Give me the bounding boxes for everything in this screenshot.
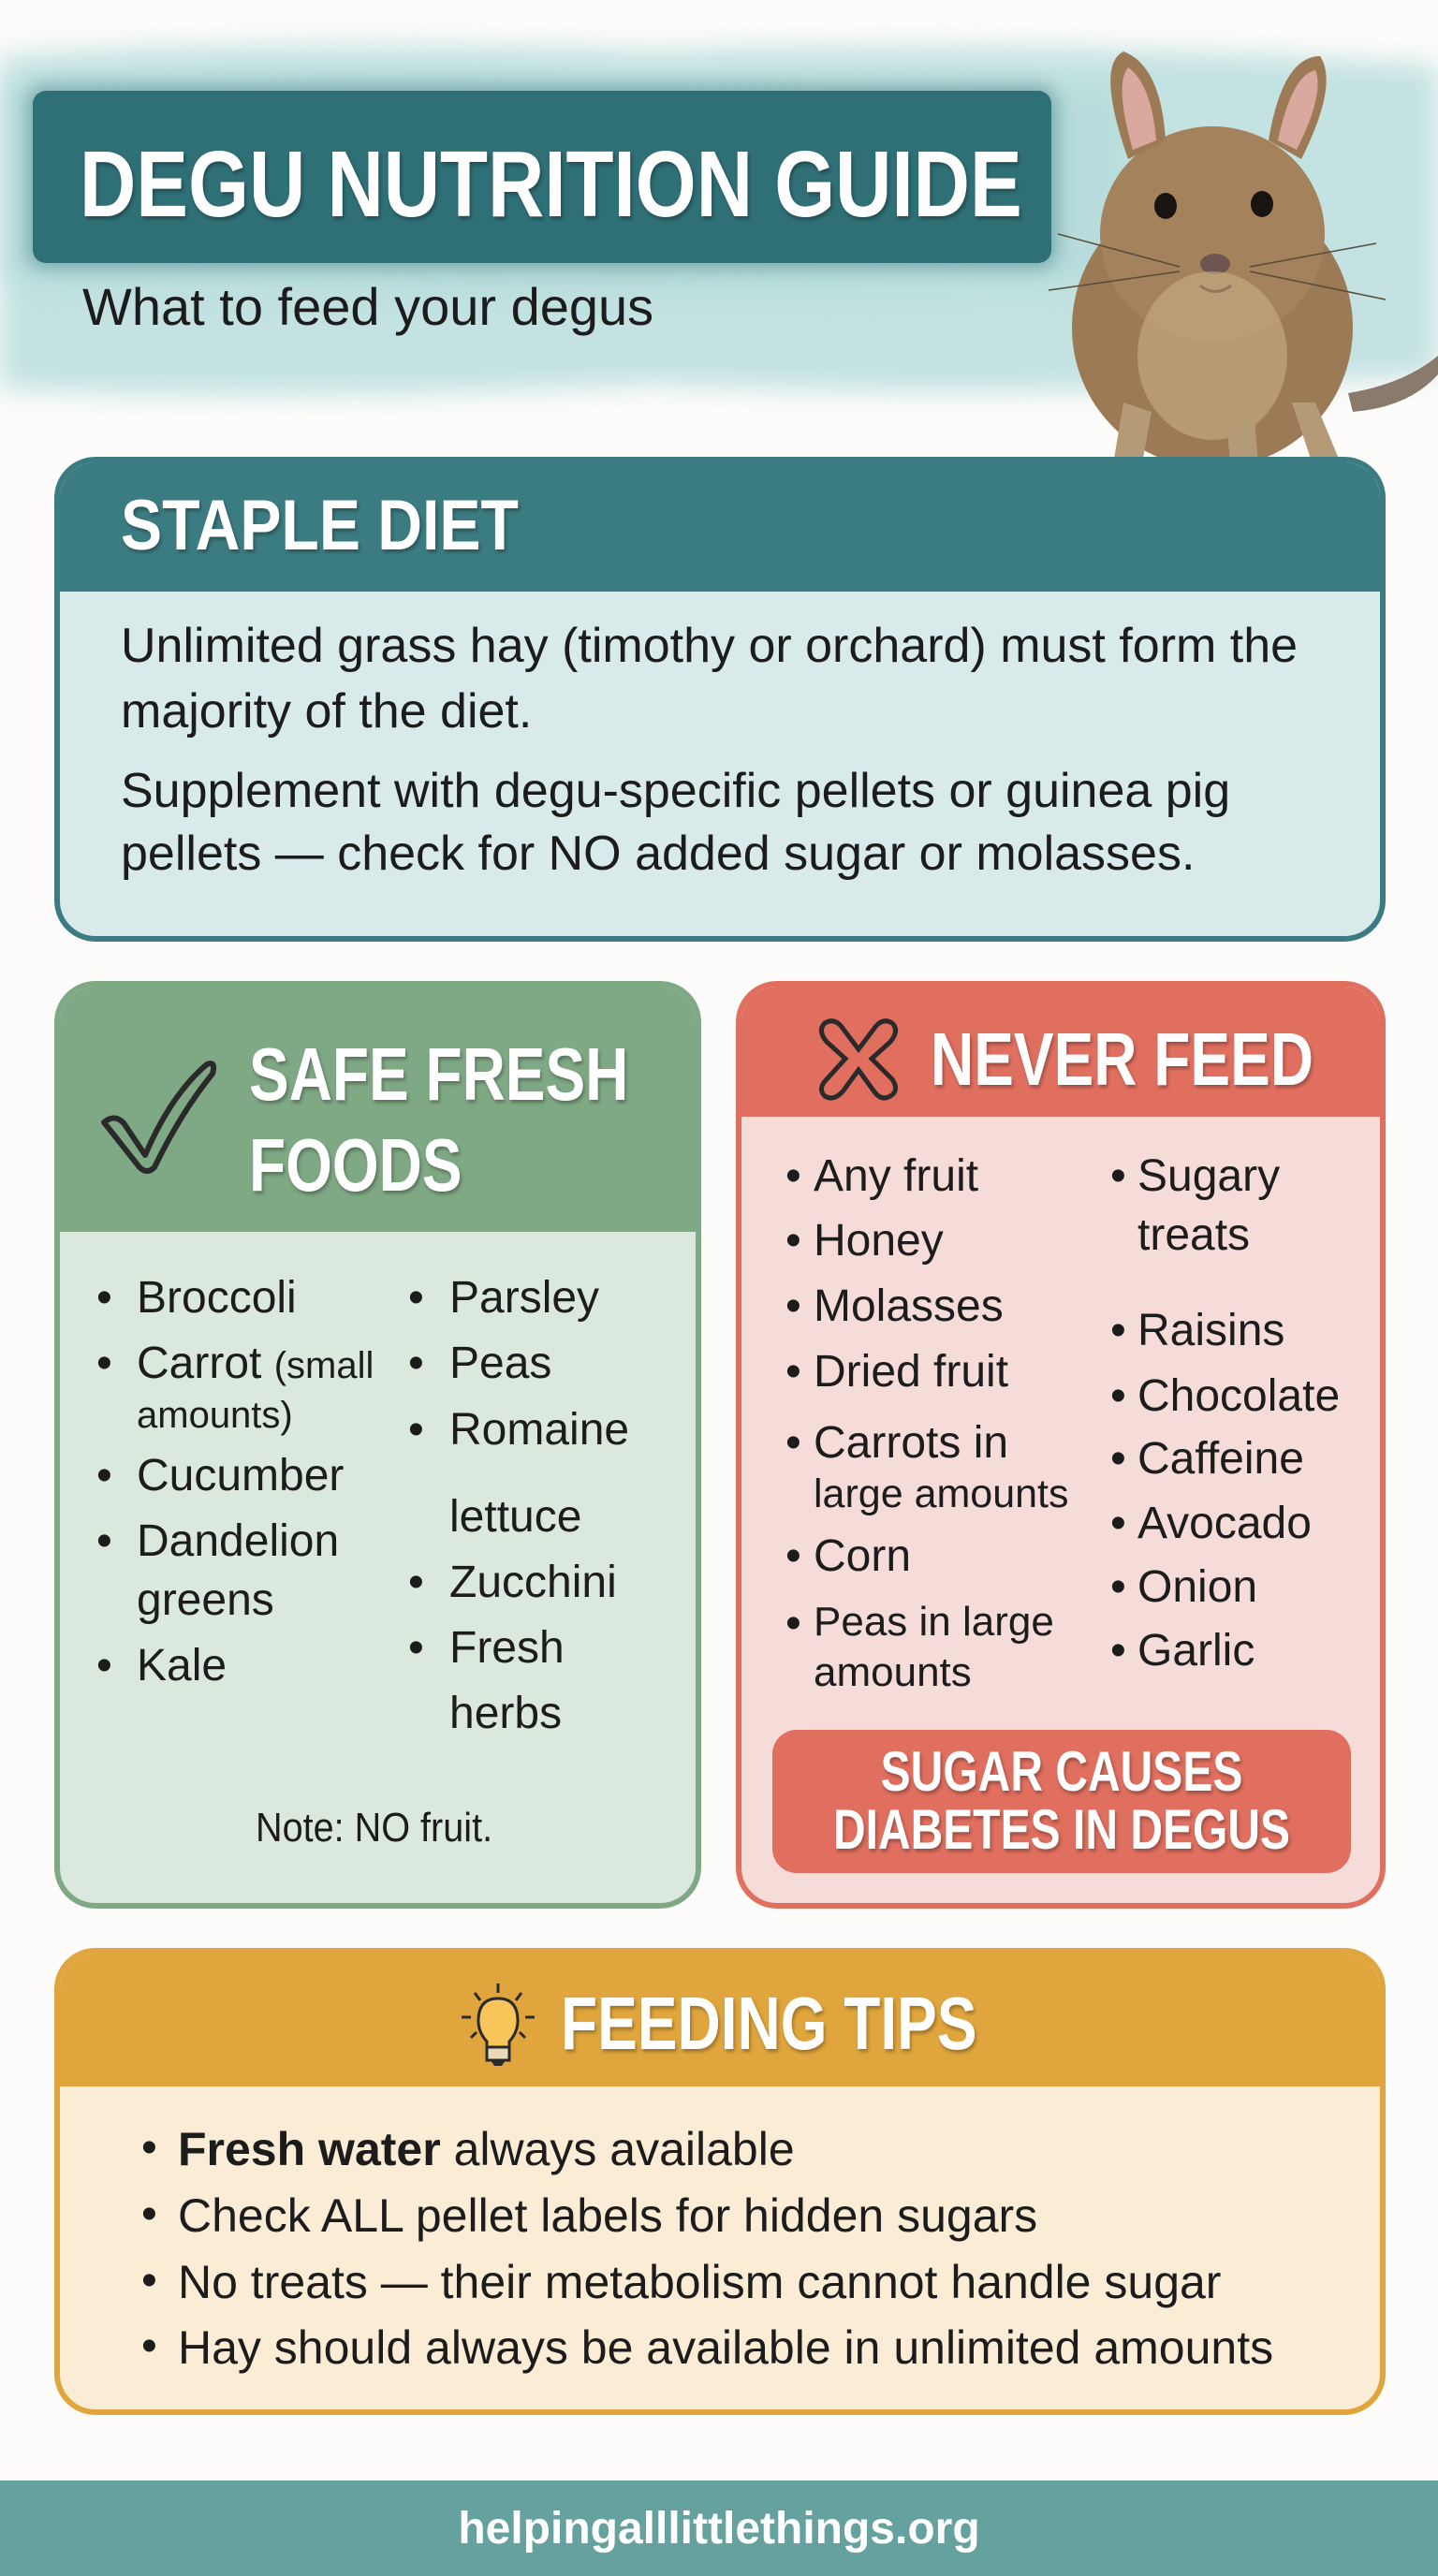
text block: staple diet [121,619,1298,881]
text block: staple diet: pellets — check for NO added sugar or molasses. [121,827,1195,881]
heading: safe fresh foods: FOODS [249,1123,462,1207]
text block: staple diet: Supplement with degu-specific pellets or guinea pig [121,764,1230,818]
list: safe foods: Fresh [449,1623,565,1673]
list: never feed: • [1110,1306,1126,1355]
list: safe foods: • [96,1516,112,1566]
list: never feed: amounts [814,1649,972,1695]
heading: feeding tips: FEEDING TIPS [561,1982,977,2065]
list: safe foods: • [96,1339,112,1388]
footer: helpingalllittlethings.org [458,2504,980,2554]
list: feeding tips [141,2123,1273,2374]
list: never feed: • [785,1599,801,1648]
heading: never feed: NEVER FEED [931,1017,1313,1101]
list: safe foods: • [408,1339,424,1388]
list: never feed: • [1110,1434,1126,1484]
list: safe foods: herbs [449,1689,562,1738]
list: never feed: • [1110,1371,1126,1421]
callout: sugar causes diabetes: SUGAR CAUSES [881,1740,1242,1803]
panel: never feed [736,981,1386,1909]
list: safe foods: Dandelion [137,1516,339,1566]
list: never feed: Caffeine [1137,1434,1304,1484]
subtitle: What to feed your degus [82,277,653,336]
list: never feed: • [785,1531,801,1581]
list: feeding tips: • [141,2321,157,2371]
list: safe foods: • [408,1558,424,1607]
list: never feed: • [785,1151,801,1201]
list: safe foods: Cucumber [137,1451,344,1500]
list: safe foods: Romaine [449,1405,629,1455]
list: safe foods: Kale [137,1641,227,1690]
list: safe foods [96,1273,629,1738]
list: feeding tips: Fresh water always available [178,2123,795,2175]
list: never feed: Any fruit [814,1151,978,1201]
list: feeding tips: • [141,2123,157,2173]
footer [0,2481,1438,2576]
callout: sugar causes diabetes [772,1730,1351,1873]
list: safe foods: • [408,1273,424,1323]
heading: staple diet: STAPLE DIET [121,486,519,565]
list: safe foods: • [408,1405,424,1455]
list: never feed: • [1110,1499,1126,1548]
header watercolor background [0,32,1438,408]
title: DEGU NUTRITION GUIDE [80,132,1022,237]
heading: safe fresh foods [249,1032,628,1207]
note: no fruit: Note: NO fruit. [256,1805,492,1851]
text block: staple diet: majority of the diet. [121,684,532,739]
list: never feed: Sugary [1137,1151,1280,1201]
list: feeding tips: • [141,2189,157,2239]
list: never feed: Peas in large [814,1599,1054,1645]
list: feeding tips: Hay should always be available in unlimited amounts [178,2321,1273,2374]
icon: X mark [818,1018,899,1101]
list: never feed: Onion [1137,1562,1257,1612]
list: never feed: • [785,1418,801,1468]
list: never feed [785,1151,1340,1695]
heading: safe fresh foods: SAFE FRESH [249,1032,628,1116]
icon: light bulb [462,1983,535,2066]
list: safe foods: • [96,1451,112,1500]
list: safe foods: Broccoli [137,1273,297,1323]
list: safe foods: greens [137,1575,274,1625]
callout: sugar causes diabetes: DIABETES IN DEGUS [833,1798,1290,1861]
list: never feed: Garlic [1137,1626,1255,1676]
list: never feed: • [785,1281,801,1331]
list: safe foods: • [408,1623,424,1673]
list: feeding tips: Check ALL pellet labels for hidden sugars [178,2189,1037,2242]
list: safe foods: • [96,1641,112,1690]
list: never feed: • [785,1216,801,1266]
list: never feed: Raisins [1137,1306,1284,1355]
list: never feed: Honey [814,1216,944,1266]
panel: feeding tips [54,1948,1386,2415]
list: feeding tips: No treats — their metabolism cannot handle sugar [178,2256,1221,2308]
list: never feed: Carrots in [814,1418,1008,1468]
illustration: degu [1049,51,1438,457]
list: never feed: • [1110,1626,1126,1676]
list: safe foods: Peas [449,1339,551,1388]
list: never feed: • [1110,1562,1126,1612]
list: safe foods: Zucchini [449,1558,617,1607]
text block: staple diet: Unlimited grass hay (timothy or orchard) must form the [121,619,1298,673]
list: never feed: • [785,1347,801,1397]
list: never feed: large amounts [814,1471,1069,1516]
list: never feed: Molasses [814,1281,1004,1331]
list: never feed: Corn [814,1531,911,1581]
panel: safe fresh foods [54,981,701,1909]
list: safe foods: Carrot (small [137,1339,374,1388]
list: safe foods: • [96,1273,112,1323]
title band [33,91,1051,263]
list: never feed: • [1110,1151,1126,1201]
list: never feed: Chocolate [1137,1371,1340,1421]
list: never feed: Avocado [1137,1499,1312,1548]
list: safe foods: lettuce [449,1492,581,1542]
icon: check mark [101,1061,217,1174]
list: safe foods: amounts) [137,1395,293,1436]
panel: staple diet [54,457,1386,942]
list: never feed: treats [1137,1210,1250,1260]
list: feeding tips: • [141,2256,157,2305]
list: never feed: Dried fruit [814,1347,1008,1397]
list: safe foods: Parsley [449,1273,599,1323]
